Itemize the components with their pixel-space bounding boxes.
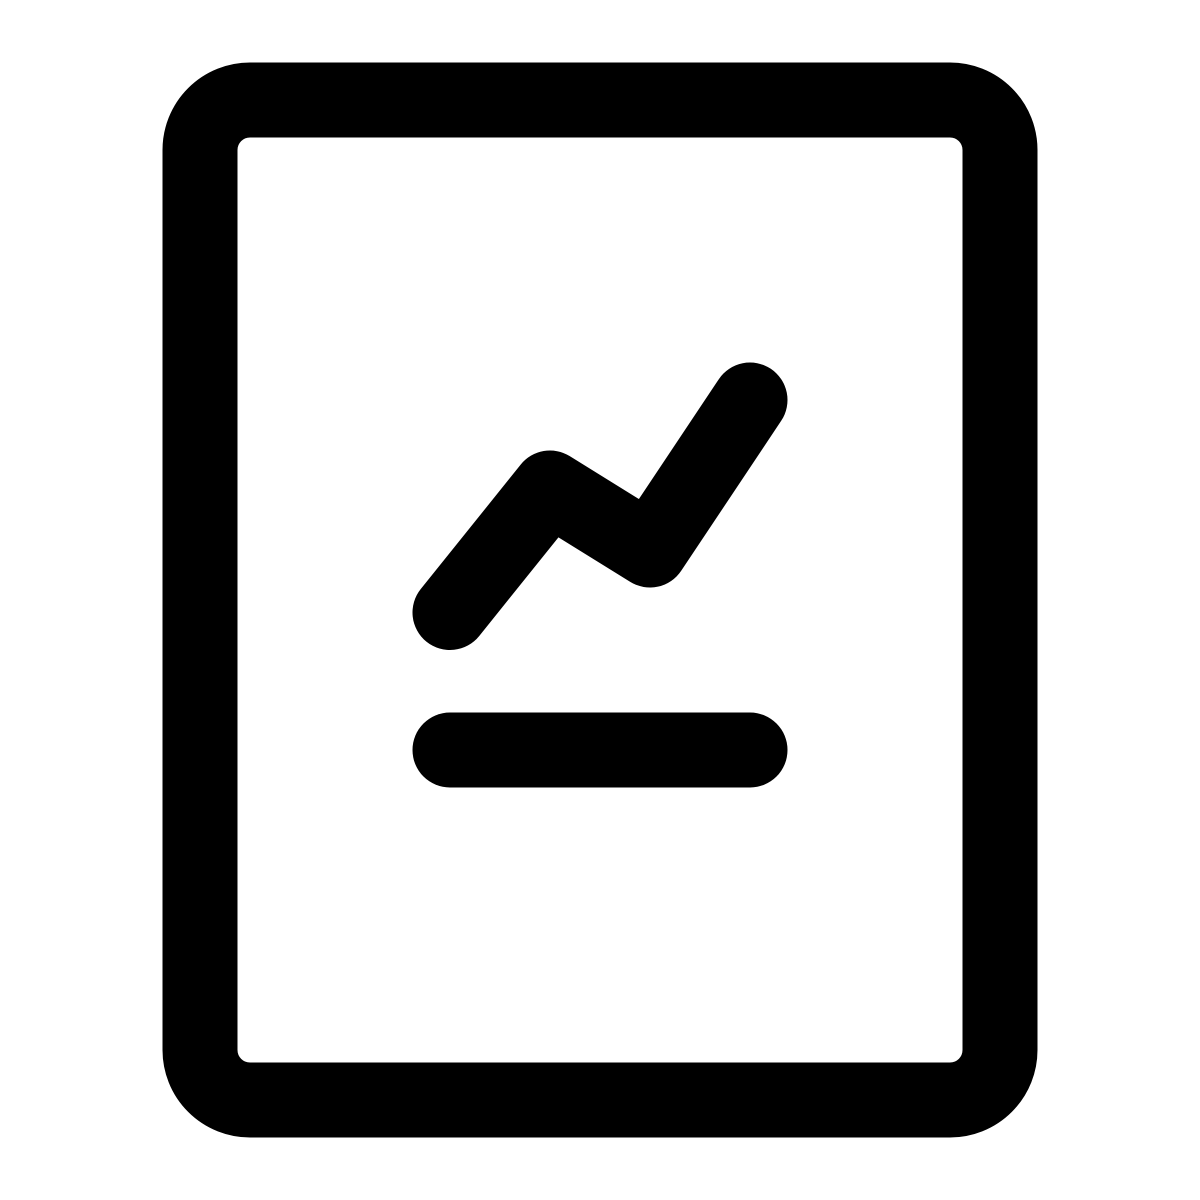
trend line — [450, 400, 750, 612]
document outline — [200, 100, 1000, 1100]
baseline bar — [450, 712, 750, 788]
